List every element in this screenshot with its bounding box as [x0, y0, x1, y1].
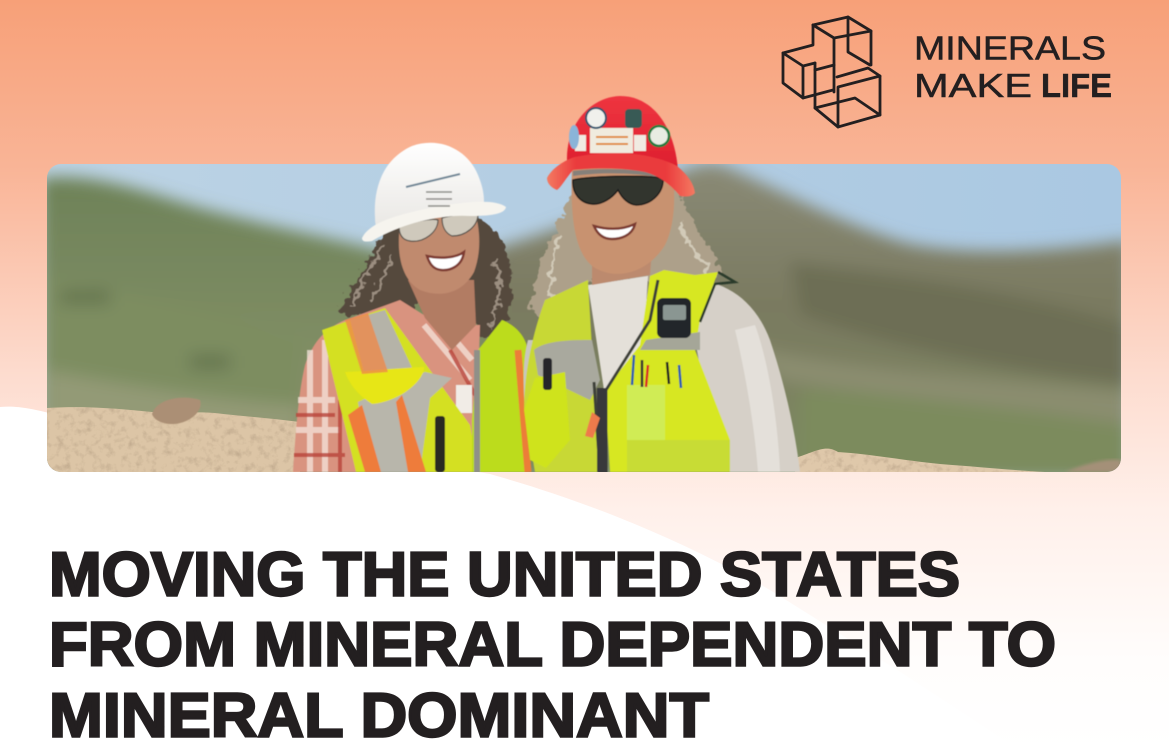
hat stickers [590, 128, 633, 153]
neck [592, 262, 651, 286]
logo: Minerals Make Life [783, 17, 1112, 127]
title [49, 540, 1056, 750]
white hard hat [375, 143, 484, 232]
rock pile left [47, 407, 300, 472]
wordmark [914, 30, 1112, 105]
plaid shirt [293, 300, 480, 472]
rock pile right [795, 449, 1045, 472]
icon: wireframe cubes [783, 17, 880, 127]
hat strap [572, 168, 657, 178]
face [572, 168, 674, 274]
red hard hat [567, 96, 678, 170]
title: MOVING THE UNITED STATES [49, 540, 960, 610]
sunglasses [573, 176, 663, 205]
pens [632, 355, 681, 388]
glasses [399, 214, 478, 241]
hair [339, 210, 511, 345]
sky [47, 164, 1121, 472]
face [399, 208, 479, 294]
wordmark: MINERALS [914, 30, 1106, 68]
grey t-shirt [588, 276, 648, 390]
radio device [657, 298, 691, 338]
background: white swoosh [0, 407, 1020, 751]
hair [530, 190, 722, 332]
neck [408, 280, 476, 350]
boulder [152, 398, 201, 424]
person: left miner [293, 143, 528, 472]
title: MINERAL DOMINANT [49, 682, 709, 750]
person: right miner [523, 96, 800, 472]
vest [322, 308, 478, 472]
photo: mine site landscape [40, 164, 1130, 480]
hills [40, 164, 1130, 480]
long sleeve shirt [690, 280, 800, 472]
title: FROM MINERAL DEPENDENT TO [49, 610, 1056, 680]
people: two miners [293, 96, 800, 472]
vest [524, 280, 604, 472]
wordmark: MAKE [914, 68, 1032, 105]
smile [594, 224, 635, 239]
white undershirt [456, 385, 472, 413]
smile [427, 252, 464, 270]
wordmark: LIFE [1041, 68, 1112, 105]
whistle [585, 412, 600, 438]
